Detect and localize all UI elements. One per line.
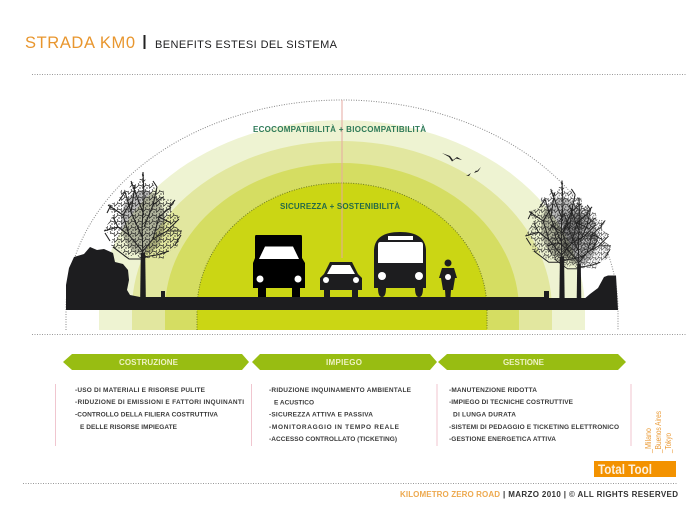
dotted outer arc xyxy=(66,100,618,330)
text list: costruzione: E DELLE RISORSE IMPIEGATE xyxy=(80,424,178,431)
cities: _Tokyo xyxy=(664,433,673,454)
road diagram xyxy=(66,100,618,330)
text list: impiego: -ACCESSO CONTROLLATO (TICKETING) xyxy=(269,436,397,443)
cities: _Buenos Aires xyxy=(654,411,663,454)
chevron: impiego xyxy=(252,354,437,370)
road xyxy=(130,291,590,310)
label: outer ring: ECOCOMPATIBILITÀ + BIOCOMPATIBILITÀ xyxy=(253,125,426,134)
chevron: impiego: IMPIEGO xyxy=(326,358,362,367)
nested green rings xyxy=(99,120,585,330)
cities xyxy=(644,411,673,454)
text list: costruzione: -RIDUZIONE DI EMISSIONI E FATTORI INQUINANTI xyxy=(75,399,244,406)
centre line xyxy=(341,100,343,258)
title xyxy=(25,34,338,52)
text list: gestione: -GESTIONE ENERGETICA ATTIVA xyxy=(449,436,556,443)
text list: gestione: DI LUNGA DURATA xyxy=(453,412,516,418)
text list: costruzione: -CONTROLLO DELLA FILIERA COSTRUTTIVA xyxy=(75,412,218,418)
label: inner ring: SICUREZZA + SOSTENIBILITÀ xyxy=(280,202,400,211)
icon: bus xyxy=(374,232,426,297)
hedge left xyxy=(66,247,150,310)
hill right xyxy=(560,276,618,310)
text list: gestione: -SISTEMI DI PEDAGGIO E TICKETING ELETTRONICO xyxy=(449,424,619,431)
logo: total tool: Total Tool xyxy=(598,461,652,477)
panel: costruzione xyxy=(55,354,249,446)
panel: gestione xyxy=(436,354,632,446)
chevron: costruzione: COSTRUZIONE xyxy=(119,358,179,367)
panel: impiego xyxy=(251,354,437,446)
chevron: costruzione xyxy=(63,354,249,370)
text list: impiego: -MONITORAGGIO IN TEMPO REALE xyxy=(269,424,400,431)
icon: birds xyxy=(442,153,481,176)
text list: gestione xyxy=(436,384,632,446)
text list: gestione: -IMPIEGO DI TECNICHE COSTRUTTIVE xyxy=(449,399,574,406)
cities: _Milano xyxy=(644,428,653,454)
text list: impiego: -RIDUZIONE INQUINAMENTO AMBIENTALE xyxy=(269,387,412,394)
icon: truck xyxy=(253,235,305,297)
title: BENEFITS ESTESI DEL SISTEMA xyxy=(155,39,338,51)
trees right xyxy=(525,180,611,300)
footer: KILOMETRO ZERO ROAD xyxy=(400,490,500,499)
footer xyxy=(400,490,678,499)
text list: gestione: -MANUTENZIONE RIDOTTA xyxy=(449,387,537,394)
text list: costruzione: -USO DI MATERIALI E RISORSE PULITE xyxy=(75,387,206,394)
text list: costruzione xyxy=(55,384,244,446)
tree left xyxy=(104,172,182,297)
icon: motorbike xyxy=(439,260,457,297)
icon: car xyxy=(320,262,362,297)
footer: | MARZO 2010 | © ALL RIGHTS RESERVED xyxy=(503,490,678,499)
chevron: gestione xyxy=(438,354,626,370)
text list: impiego xyxy=(251,384,412,446)
title: STRADA KM0 xyxy=(25,34,135,52)
chevron: gestione: GESTIONE xyxy=(503,358,545,367)
text list: impiego: -SICUREZZA ATTIVA E PASSIVA xyxy=(269,412,373,418)
text list: impiego: E ACUSTICO xyxy=(274,400,314,406)
